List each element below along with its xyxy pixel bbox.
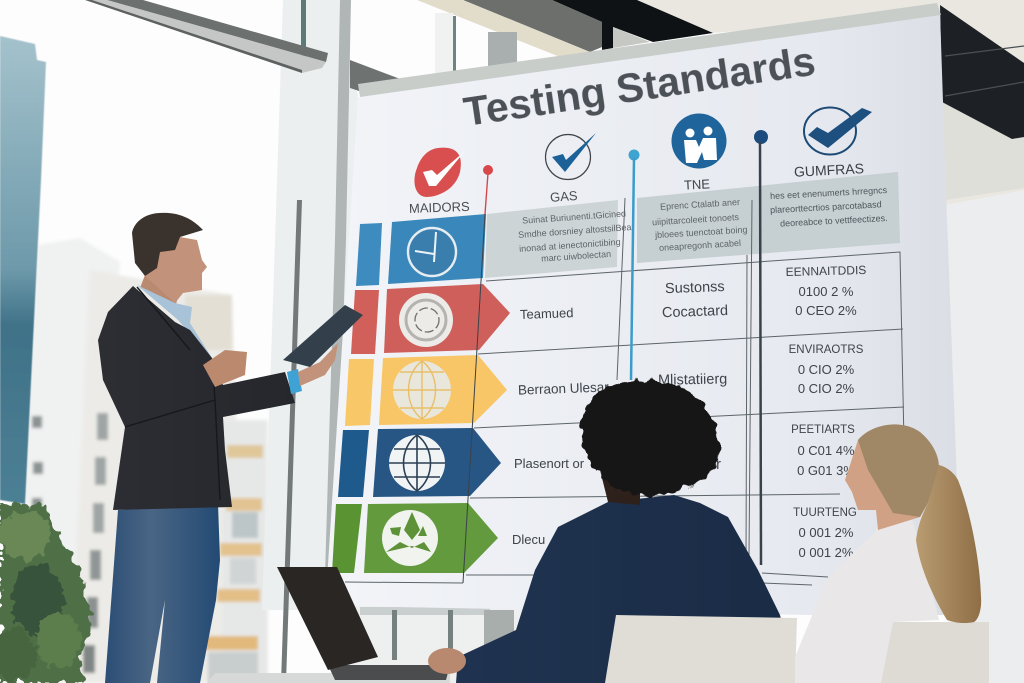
far hand: [298, 343, 338, 386]
column header: Gumfras: [794, 108, 872, 180]
column header: Gas: [546, 133, 596, 205]
stats cell: Enviraotrs: [789, 344, 864, 396]
description: Gas: [518, 208, 635, 264]
description: Gas: marc uiwbolectan: [541, 249, 611, 264]
table grid: [345, 198, 905, 585]
stats cell: Eennaitddis: 0100 2 %: [799, 284, 854, 299]
description: Gumfras: plareorttecrtios parcotabasd: [770, 199, 882, 215]
row label: Berraon Ulesar: Berraon Ulesar: [518, 379, 610, 398]
icon: red check badge: [414, 148, 465, 197]
row label: Plasenort: Plasenort or: [514, 456, 585, 471]
row band: navy arrow: [338, 428, 585, 497]
rear beam: [350, 60, 403, 92]
column header: Gumfras: GUMFRAS: [794, 160, 864, 180]
row band: clock (blue): [356, 214, 486, 286]
presenter man: [98, 213, 363, 683]
row band: red arrow: [351, 284, 574, 354]
icon: yellow globe: [393, 361, 451, 419]
chair back: [605, 615, 797, 683]
poster title: Testing Standards: [461, 38, 818, 135]
icon: green landscape: [382, 510, 438, 566]
stats cell: Eennaitddis: EENNAITDDIS: [785, 263, 867, 279]
row band: yellow arrow: [345, 355, 610, 426]
column header: Maidors: MAIDORS: [409, 199, 470, 216]
description band: Tne and Gumfras: [637, 172, 900, 263]
pillar: [262, 0, 358, 610]
hair: [132, 213, 203, 276]
icon: clock: [408, 228, 456, 276]
face: [145, 237, 207, 303]
column header: Gas: GAS: [550, 188, 578, 205]
row band: green arrow: [332, 503, 545, 573]
description: Gas: Smdhe dorsniey altostsilBear: [518, 222, 635, 240]
middle column text: Sustonss: [665, 279, 725, 297]
neck: [140, 262, 183, 304]
stats cell: Eennaitddis: 0 CEO 2%: [795, 303, 857, 318]
description: Tne: Eprenc Ctalatb aner: [660, 197, 740, 212]
hair: [858, 424, 939, 517]
distant white building: [22, 238, 268, 683]
icon: red row emblem: [399, 293, 453, 347]
vertical pin: navy: [754, 130, 768, 565]
middle column text: er: [708, 457, 721, 473]
jacket: [98, 286, 295, 510]
description: Tne: jbloees tuenctoat boing: [654, 224, 748, 240]
column header: Tne: TNE: [684, 176, 711, 193]
raised hand: [203, 350, 247, 387]
shirt: [137, 285, 212, 358]
poster: Testing Standards: [327, 3, 975, 615]
glass tower: [0, 36, 46, 504]
row label: Dlecu: Dlecu: [512, 532, 545, 547]
vertical pin: red: [463, 165, 493, 583]
jacket: [456, 495, 797, 683]
icon: navy globe: [389, 435, 445, 491]
ponytail: [916, 465, 981, 623]
stats cell: Peetiarts: PEETIARTS: [791, 424, 855, 436]
neck and face: [845, 440, 920, 530]
poster sheet: [327, 13, 975, 615]
audience: person with dark hair: [428, 380, 797, 683]
description: Tne: [652, 197, 748, 253]
rear columns: [435, 13, 453, 85]
row label: Teamued: Teamued: [520, 305, 574, 322]
description: Gas: Suinat Buriunenti.tGicined: [522, 208, 626, 226]
blouse: [795, 520, 939, 683]
beam: [107, 0, 328, 62]
hand: [428, 648, 466, 674]
stats cell: Eennaitddis: [785, 263, 867, 318]
description: Tne: oneapregonh acabel: [659, 238, 741, 253]
stats cell: Tuurteng: 0 001 2%: [799, 525, 854, 540]
window frames and pillar: [85, 0, 610, 683]
laptop on desk: [207, 567, 450, 683]
description: Tne: uiipittarcoleeit tonoets: [652, 212, 740, 227]
middle column text: [658, 279, 728, 473]
hair: [581, 380, 720, 495]
description: Gumfras: hes eet enenumerts hrregncs: [770, 185, 888, 201]
column header: Tne: [672, 114, 726, 193]
audience: woman with ponytail: [795, 424, 989, 683]
foliage: [0, 505, 92, 683]
vertical pin: cyan: [628, 150, 640, 380]
column header: Maidors: [409, 148, 470, 216]
tablet: [283, 305, 363, 367]
icon: navy check in circle: [804, 108, 872, 154]
middle column text: Mlistatiierg: [658, 371, 727, 389]
ceiling and right wall: [417, 0, 1024, 683]
middle column text: Cocactard: [662, 303, 728, 321]
icon: two people in blue circle: [672, 114, 726, 168]
description band: Gas: [485, 200, 618, 278]
description: Gas: inonad at ienectonictibing: [519, 237, 621, 254]
stats cell: Tuurteng: [793, 507, 857, 560]
stats cell: Enviraotrs: 0 CIO 2%: [798, 381, 855, 396]
neck: [600, 470, 640, 505]
cuff: [287, 369, 302, 394]
description: Gumfras: deoreabce to vettfeectizes.: [780, 213, 888, 229]
stats cell: Enviraotrs: 0 CIO 2%: [798, 362, 855, 377]
below poster: [345, 605, 610, 683]
stats cell: Peetiarts: 0 C01 4%: [797, 443, 855, 458]
stats cell: Peetiarts: [791, 424, 855, 478]
poster top rail: [358, 3, 941, 97]
stats cell: Peetiarts: 0 G01 3%: [797, 463, 855, 478]
stats cell: Tuurteng: TUURTENG: [793, 507, 857, 519]
icon: blue check in circle: [546, 133, 596, 180]
chair back: [881, 622, 989, 683]
description: Gumfras: [770, 185, 888, 229]
stats cell: Enviraotrs: ENVIRAOTRS: [789, 344, 864, 356]
jeans: [105, 504, 220, 683]
stats cell: Tuurteng: 0 001 2%: [799, 545, 854, 560]
